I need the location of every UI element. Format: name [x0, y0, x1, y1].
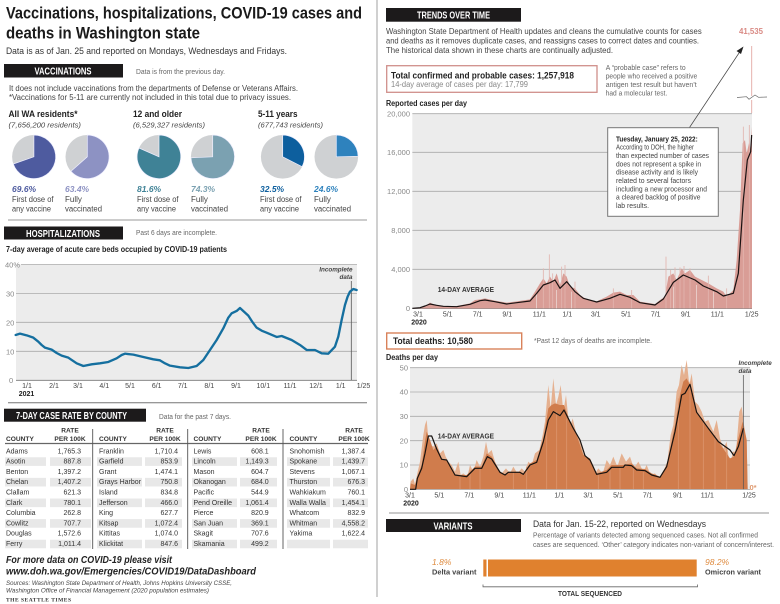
variants note: cases are sequenced. ‘Other’ category indicates non-variant of concern/interest.: [533, 542, 774, 549]
column 1: Chelan: [6, 479, 28, 486]
x axis labels: 9/1: [673, 492, 683, 500]
stacked bar: variants: [483, 560, 697, 576]
y axis labels: 30: [400, 412, 408, 421]
x axis labels: 2021: [19, 391, 34, 398]
intro text: and deaths as it removes duplicate cases, and reassigns cases to correct dates and counties.: [386, 37, 699, 46]
group heading: 12 and older: [133, 109, 205, 130]
panel: trends over time: [386, 8, 772, 508]
label: delta variant: [432, 557, 477, 576]
label: 32.5%: [260, 184, 302, 214]
label: 74.3%: 74.3%: [191, 184, 216, 194]
x axis labels: 1/25: [745, 312, 759, 319]
column 3: 369.1: [251, 520, 269, 527]
column 3: Skamania: [194, 541, 225, 548]
y axis labels: 16,000: [387, 148, 410, 157]
callout: January 25 note: does not represent a spike in: [616, 161, 701, 168]
table header: PER 100K: [149, 436, 181, 443]
column 2: [99, 448, 178, 548]
annotation: incomplete data: data: [340, 274, 353, 281]
column 2: 1,474.1: [155, 469, 178, 476]
label: 74.3%: vaccinated: [191, 204, 228, 214]
column 3: [194, 448, 269, 548]
x axis labels: 5/1: [613, 492, 623, 500]
x axis labels: 6/1: [152, 383, 162, 390]
y axis labels: 12,000: [387, 187, 410, 196]
column 1: Clallam: [6, 490, 30, 496]
vaccination notes: [9, 84, 298, 102]
group heading: 5-11 years: [258, 109, 324, 130]
column 1: 1,765.3: [58, 448, 81, 455]
column 4: 1,454.1: [342, 500, 365, 507]
note: probable case: [606, 65, 697, 97]
column 2: Franklin: [99, 448, 124, 455]
more data link: For more data on COVID-19 please visit: [6, 554, 172, 566]
label: omicron variant: Omicron variant: [705, 568, 761, 576]
column 2: 466.0: [160, 500, 178, 507]
note: probable case: had a molecular test.: [606, 90, 667, 97]
label: 63.4%: vaccinated: [65, 204, 102, 214]
column 2: 750.8: [160, 479, 178, 486]
x axis labels: 11/1: [701, 492, 714, 500]
table header: COUNTY: [99, 436, 127, 443]
column 2: 627.7: [160, 510, 178, 517]
title: deaths in Washington state: [6, 24, 200, 42]
callout: total deaths: Total deaths: 10,580: [393, 336, 473, 347]
callout: total cases: 14-day average of cases per day: 17,799: [391, 80, 529, 89]
callout: January 25 note: Tuesday, January 25, 2022:: [616, 136, 698, 144]
column 1: 621.3: [63, 490, 81, 496]
y axis labels: 10: [400, 461, 408, 470]
column 3: Pacific: [194, 490, 215, 496]
column 2: 1,710.4: [155, 448, 178, 455]
column 2: 1,072.4: [155, 520, 178, 527]
x axis labels: 11/1: [283, 383, 297, 390]
off-scale peak: 41,535: 41,535: [739, 27, 764, 36]
group heading: all residents: [8, 109, 81, 130]
column 3: 604.7: [251, 469, 269, 476]
sources: Sources: Washington State Department of Health, Johns Hopkins University CSSE,: [6, 580, 232, 587]
y axis labels: 10: [6, 347, 14, 356]
table header: COUNTY: [194, 436, 222, 443]
column 3: Okanogan: [194, 479, 226, 486]
table header: COUNTY: [290, 436, 318, 443]
group heading: 12 and older: (6,529,327 residents): [133, 120, 205, 130]
column 1: Clark: [6, 500, 23, 507]
x axis labels: 5/1: [443, 312, 453, 319]
note: past 7 days: Data for the past 7 days.: [159, 414, 231, 421]
column 1: Asotin: [6, 459, 26, 466]
sources: [6, 580, 232, 594]
x axis labels: 1/1: [336, 383, 346, 390]
heading: county case rate: [4, 409, 146, 422]
column 1: 1,397.2: [58, 469, 81, 476]
label: 69.6%: any vaccine: [12, 204, 52, 214]
column 3: 544.9: [251, 490, 269, 496]
arrow to peak: [690, 46, 744, 128]
note: probable case: A “probable case” refers to: [606, 65, 686, 72]
callout: January 25 note: lab results.: [616, 203, 649, 210]
column 2: Garfield: [99, 459, 124, 466]
label: 69.6%: First dose of: [12, 195, 54, 204]
vaccination notes: *Vaccinations for 5-11 are currently not included in this total due to privacy issues.: [9, 93, 291, 102]
chart title: cases: Reported cases per day: [386, 99, 467, 108]
label: delta variant: Delta variant: [432, 568, 477, 576]
callout: total cases: [387, 66, 597, 92]
column 2: 834.8: [160, 490, 178, 496]
column 1: Adams: [6, 448, 28, 455]
intro text: The historical data shown in these charts are continually adjusted.: [386, 46, 613, 55]
table header: RATE: [345, 428, 363, 434]
column 4: 832.9: [347, 510, 365, 517]
line chart: acute care beds: [5, 260, 370, 398]
column 2: Jefferson: [99, 500, 128, 507]
x axis labels: [19, 383, 370, 398]
label: 24.6%: vaccinated: [314, 204, 351, 214]
14-day average line: [412, 135, 752, 308]
column 4: Snohomish: [290, 448, 325, 455]
column 2: 847.6: [160, 541, 178, 548]
x axis labels: 2020: [403, 500, 419, 508]
hospitalization line: [16, 289, 357, 368]
y axis labels: 20,000: [387, 110, 410, 118]
table header: RATE: [156, 428, 174, 434]
panel: vaccinations: [4, 64, 358, 214]
callout: January 25 note: a cleared backlog of positive: [616, 195, 701, 202]
table header: RATE: [252, 428, 270, 434]
column 4: 760.1: [347, 490, 365, 496]
x axis labels: 4/1: [99, 383, 109, 390]
chart: deaths: [400, 360, 772, 508]
x axis labels: 3/1: [591, 312, 601, 319]
column 1: 1,407.2: [58, 479, 81, 486]
heading: hospitalizations: [4, 226, 123, 240]
label: 63.4%: [65, 184, 102, 214]
column 4: 1,387.4: [342, 448, 365, 455]
column 1: 707.7: [63, 520, 81, 527]
x axis labels: 11/1: [523, 492, 536, 500]
annotation: incomplete data: [738, 360, 772, 375]
x axis labels: 7/1: [178, 383, 188, 390]
y axis labels: 20: [400, 436, 408, 445]
column 1: 1,011.4: [58, 541, 81, 548]
label: 24.6%: 24.6%: [313, 184, 339, 194]
column 3: Lewis: [194, 448, 212, 455]
subtitle: Data is as of Jan. 25 and reported on Mondays, Wednesdays and Fridays.: [6, 46, 287, 57]
column 4: Thurston: [290, 479, 317, 486]
column 3: 1,061.4: [245, 500, 269, 507]
column 2: King: [99, 510, 113, 517]
title: [6, 4, 362, 42]
pie: 12 and older first dose: [137, 135, 181, 179]
x axis labels: 1/25: [357, 383, 370, 390]
pie: all residents first dose: [12, 135, 56, 179]
callout: January 25 note: According to DOH, the higher: [616, 145, 695, 152]
chart: reported cases: [387, 110, 759, 326]
y axis labels: [387, 110, 410, 313]
annotation: incomplete data: data: [738, 368, 752, 375]
column 3: 707.6: [251, 531, 269, 538]
column 4: Whitman: [290, 520, 317, 527]
group heading: 5-11 years: 5-11 years: [258, 109, 298, 119]
pie: 5-11 first dose: [261, 135, 305, 179]
variants subheading: Data for Jan. 15-22, reported on Wednesdays: [533, 519, 707, 529]
more data link: www.doh.wa.gov/Emergencies/COVID19/DataDashboard: [6, 566, 257, 578]
heading: variants: [386, 519, 521, 532]
column 2: 853.9: [160, 459, 178, 466]
column 2: Island: [99, 490, 118, 496]
more data link: [6, 554, 257, 578]
column 4: Stevens: [290, 469, 315, 476]
column 4: Yakima: [290, 531, 312, 538]
heading: hospitalizations: HOSPITALIZATIONS: [26, 229, 100, 240]
column 4: Spokane: [290, 459, 317, 466]
x axis labels: 5/1: [125, 383, 135, 390]
group heading: all residents: (7,656,200 residents): [8, 120, 81, 130]
column 1: 780.1: [63, 500, 81, 507]
column 4: 676.3: [347, 479, 365, 486]
x axis labels: 9/1: [502, 312, 512, 319]
title: Vaccinations, hospitalizations, COVID-19 cases and: [6, 4, 362, 22]
column 3: Pend Oreille: [194, 500, 232, 507]
note: deaths incomplete: *Past 12 days of deaths are incomplete.: [534, 338, 652, 345]
x axis labels: 9/1: [231, 383, 241, 390]
label: 24.6%: Fully: [314, 195, 331, 204]
y axis labels: 0: [406, 304, 410, 313]
callout: January 25 note: than expected number of cases: [616, 153, 709, 160]
variants note: [533, 532, 774, 549]
column 4: Wahkiakum: [290, 490, 326, 496]
column 3: Pierce: [194, 510, 213, 517]
table header: PER 100K: [338, 436, 370, 443]
column 2: Klickitat: [99, 541, 123, 548]
label: 63.4%: Fully: [65, 195, 82, 204]
x axis labels: [411, 312, 759, 326]
pie: all residents fully vaccinated: [66, 135, 109, 179]
label: delta variant: 1.8%: [432, 557, 452, 567]
table header: RATE: [61, 428, 79, 434]
column 4: Walla Walla: [290, 500, 326, 507]
x axis labels: 3/1: [405, 492, 415, 500]
label: 81.6%: 81.6%: [137, 184, 162, 194]
label: 81.6%: First dose of: [137, 195, 179, 204]
column 1: Douglas: [6, 531, 32, 538]
y axis labels: 30: [6, 290, 14, 298]
chart title: 7-day average of acute care beds occupied by COVID-19 patients: [6, 245, 227, 254]
column 1: Ferry: [6, 541, 23, 548]
y axis labels: 0: [9, 376, 13, 385]
label: 81.6%: [137, 184, 179, 214]
pie: 12 and older fully vaccinated: [191, 135, 235, 179]
column 2: Grays Harbor: [99, 479, 142, 486]
column 1: Columbia: [6, 510, 36, 517]
x axis labels: 7/1: [643, 492, 653, 500]
x axis labels: 5/1: [434, 492, 444, 500]
y axis labels: 40: [400, 388, 408, 397]
14-day average line: [410, 384, 743, 489]
off-scale peak: 41,535: [737, 27, 767, 113]
x axis labels: 3/1: [583, 492, 593, 500]
heading: county case rate: 7-DAY CASE RATE BY COUNTY: [16, 411, 127, 422]
x axis labels: 1/25: [742, 492, 756, 500]
x axis labels: 7/1: [651, 312, 661, 319]
group heading: 12 and older: 12 and older: [133, 109, 182, 119]
column 3: 684.0: [251, 479, 269, 486]
callout: January 25 note: [608, 128, 718, 216]
heading: trends over time: [386, 8, 521, 22]
column 3: 499.2: [251, 541, 269, 548]
column 1: Cowlitz: [6, 520, 29, 527]
credit: THE SEATTLE TIMES: [6, 598, 71, 604]
x axis labels: 12/1: [309, 383, 323, 390]
intro text: [386, 27, 702, 55]
heading: vaccinations: VACCINATIONS: [34, 66, 92, 77]
column 2: Kitsap: [99, 520, 119, 527]
label: 32.5%: First dose of: [260, 195, 302, 204]
callout: January 25 note: including a new processor and: [616, 186, 707, 193]
x axis labels: 1/1: [22, 383, 32, 390]
vaccination notes: It does not include vaccinations from the departments of Defense or Veterans Affairs.: [9, 84, 298, 93]
column 4: 4,558.2: [342, 520, 365, 527]
x axis labels: 5/1: [621, 312, 631, 319]
column 4: Whatcom: [290, 510, 319, 517]
x axis labels: 2/1: [49, 383, 59, 390]
column 4: 1,439.7: [342, 459, 365, 466]
x axis labels: 9/1: [681, 312, 691, 319]
x axis labels: 1/1: [562, 312, 572, 319]
x axis labels: 3/1: [413, 312, 423, 319]
label: 24.6%: [313, 184, 351, 214]
y axis labels: [400, 364, 408, 494]
column 3: Skagit: [194, 531, 213, 538]
x axis labels: [403, 492, 756, 508]
label: 69.6%: [12, 184, 54, 214]
column 3: 608.1: [251, 448, 269, 455]
label: 14-day average: 14-DAY AVERAGE: [438, 285, 494, 294]
label: omicron variant: [705, 557, 761, 576]
note: incomplete days: Past 6 days are incomplete.: [136, 230, 217, 237]
panel: county case rate: [4, 409, 370, 550]
column 3: San Juan: [194, 520, 223, 527]
table: county rates: [5, 428, 370, 550]
sources: Washington Office of Financial Management (2020 population estimates): [6, 588, 209, 594]
column 2: Kittitas: [99, 531, 121, 538]
variants note: Percentage of variants detected among sequenced cases. Not all confirmed: [533, 532, 758, 540]
callout: total cases: Total confirmed and probable cases: 1,257,918: [391, 70, 574, 82]
y axis labels: 50: [400, 364, 408, 373]
table header: PER 100K: [245, 436, 277, 443]
x axis labels: 7/1: [473, 312, 483, 319]
column 1: 262.8: [63, 510, 81, 517]
label: zero asterisk: 0*: [750, 483, 757, 492]
column 3: Mason: [194, 469, 215, 476]
x axis labels: 10/1: [256, 383, 270, 390]
column 2: 1,074.0: [155, 531, 178, 538]
label: 69.6%: 69.6%: [12, 184, 37, 194]
label: 32.5%: 32.5%: [260, 184, 285, 194]
callout: total deaths: [387, 333, 522, 349]
x axis labels: 11/1: [533, 312, 546, 319]
column 4: [290, 448, 365, 538]
column 1: Benton: [6, 469, 28, 476]
x axis labels: 7/1: [464, 492, 474, 500]
annotation: incomplete data: Incomplete: [319, 266, 353, 274]
label: 74.3%: Fully: [191, 195, 208, 204]
label: 63.4%: 63.4%: [65, 184, 90, 194]
column 3: Lincoln: [194, 459, 216, 466]
y axis labels: 0: [404, 485, 408, 494]
x axis labels: 9/1: [494, 492, 504, 500]
intro text: Washington State Department of Health updates and cleans the cumulative counts for cases: [386, 27, 702, 36]
x axis labels: 3/1: [73, 383, 83, 390]
x axis labels: 8/1: [204, 383, 214, 390]
annotation: incomplete data: [319, 266, 353, 281]
heading: vaccinations: [4, 64, 123, 78]
note: probable case: people who received a positive: [606, 74, 697, 80]
note: probable case: antigen test result but haven’t: [606, 82, 697, 89]
column 3: 1,149.3: [245, 459, 269, 466]
y axis labels: 40%: [5, 260, 20, 270]
column 3: 820.9: [251, 510, 269, 517]
y axis labels: 20: [6, 318, 14, 327]
heading: variants: VARIANTS: [434, 521, 473, 532]
panel: hospitalizations: [4, 226, 370, 398]
x axis labels: 2020: [411, 320, 427, 326]
column 1: 887.8: [63, 459, 81, 466]
annotation: incomplete data: Incomplete: [738, 360, 772, 367]
label: 32.5%: any vaccine: [260, 204, 300, 214]
label: omicron variant: 98.2%: [705, 557, 730, 567]
callout: January 25 note: disease activity and is likely: [616, 170, 698, 177]
note: data timing: Data is from the previous day.: [136, 69, 225, 76]
y axis labels: 8,000: [391, 226, 410, 235]
panel: variants: [386, 519, 774, 598]
pie: 5-11 fully vaccinated: [314, 135, 358, 179]
group heading: all residents: All WA residents*: [8, 109, 78, 119]
bracket: total sequenced: TOTAL SEQUENCED: [558, 589, 623, 598]
column 1: 1,572.6: [58, 531, 81, 538]
x axis labels: 1/1: [554, 492, 564, 500]
column 4: 1,622.4: [342, 531, 365, 538]
label: 74.3%: [191, 184, 228, 214]
column 1: [6, 448, 81, 548]
table header: COUNTY: [6, 436, 34, 443]
label: 81.6%: any vaccine: [137, 204, 177, 214]
column 4: 1,067.1: [342, 469, 365, 476]
table header: [6, 428, 370, 443]
table header: PER 100K: [54, 436, 86, 443]
heading: trends over time: TRENDS OVER TIME: [417, 11, 490, 22]
y axis labels: 4,000: [391, 265, 410, 274]
group heading: 5-11 years: (677,743 residents): [258, 120, 324, 130]
callout: January 25 note: related to several factors: [616, 178, 691, 185]
x axis labels: 11/1: [711, 312, 724, 319]
chart title: deaths: Deaths per day: [386, 353, 438, 362]
y axis labels: [5, 260, 20, 385]
label: 14-day average: 14-DAY AVERAGE: [438, 432, 494, 441]
column 2: Grant: [99, 469, 117, 476]
